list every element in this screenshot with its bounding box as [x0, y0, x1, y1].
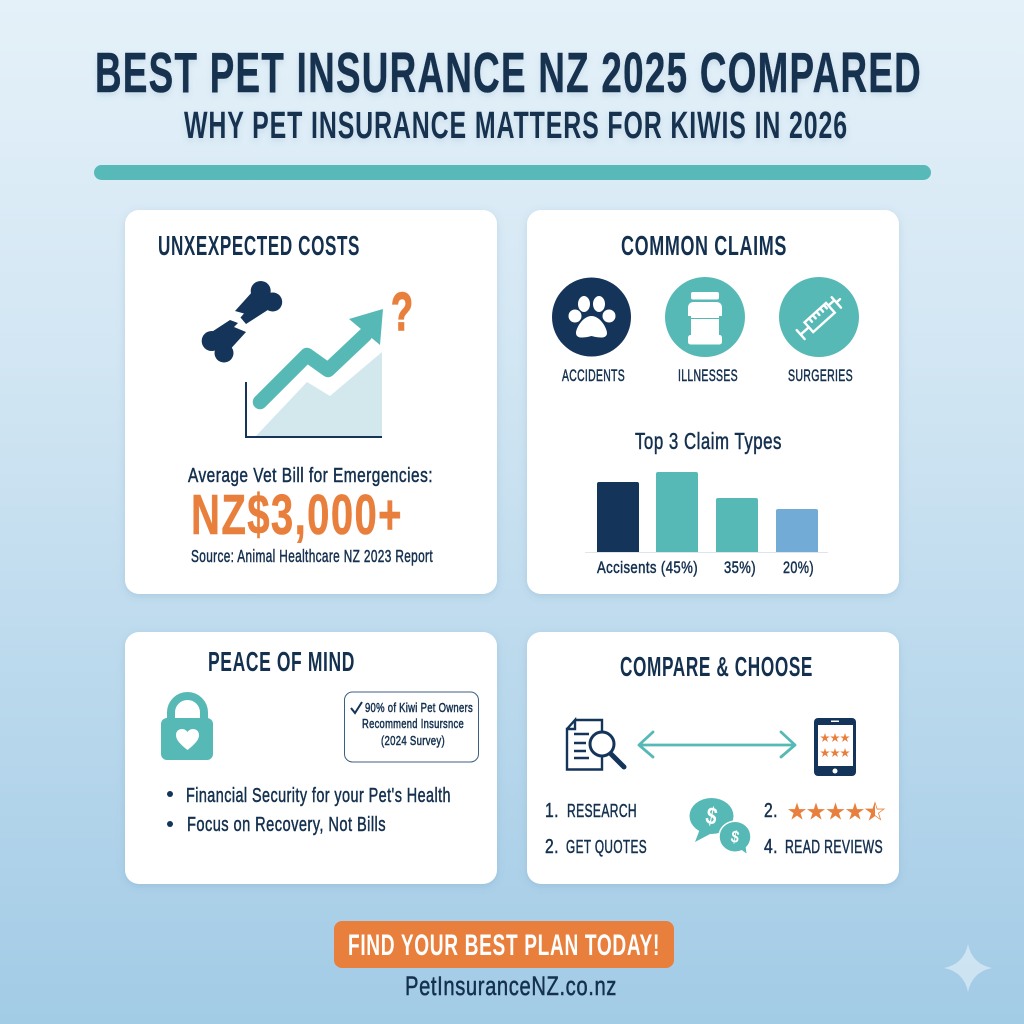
chart: rising cost	[246, 309, 383, 437]
step: 2 get quotes: GET QUOTES	[566, 836, 647, 857]
bullet two	[167, 814, 386, 836]
text: average vet bill label: Average Vet Bill for Emergencies:	[188, 465, 433, 487]
icon: syringe	[779, 277, 859, 357]
step: 1 research: RESEARCH	[567, 800, 637, 821]
bullet one	[167, 785, 451, 807]
callout line 1: 90% of Kiwi Pet Owners	[365, 700, 473, 715]
bar chart	[585, 472, 828, 553]
icon: check mark	[351, 702, 362, 713]
icon: sparkle	[944, 944, 992, 992]
step: 2 get quotes	[545, 836, 647, 858]
step: 4 read reviews	[764, 836, 883, 858]
icon: medicine jar	[665, 277, 745, 357]
callout line 2: Recommend Insursnce	[362, 716, 464, 731]
heading: unexpected costs: UNXEXPECTED COSTS	[158, 230, 360, 261]
panel: common claims	[527, 210, 899, 594]
callout: survey	[344, 692, 478, 762]
bullet one: Financial Security for your Pet's Health	[186, 785, 451, 807]
heading: compare and choose: COMPARE & CHOOSE	[620, 651, 813, 682]
icon: speech bubbles with dollars	[690, 798, 751, 854]
icon: document with magnifier	[567, 720, 624, 770]
call to action button	[334, 921, 674, 968]
icon: question mark: ?	[391, 282, 413, 342]
heading: peace of mind: PEACE OF MIND	[208, 646, 355, 677]
step: 4 read reviews: READ REVIEWS	[785, 836, 883, 857]
bar label: 20%: 20%)	[783, 558, 814, 577]
step: 4 read reviews: 4.	[764, 836, 778, 858]
arrow: double-headed	[639, 732, 795, 757]
website url: PetInsuranceNZ.co.nz	[405, 971, 617, 1001]
bullet two: Focus on Recovery, Not Bills	[187, 814, 386, 836]
bar label: accidents 45%: Accisents (45%)	[597, 558, 698, 577]
call to action button: FIND YOUR BEST PLAN TODAY!	[348, 929, 660, 962]
step: 2 get quotes: 2.	[545, 836, 559, 858]
icon: speech bubbles with dollars: $	[703, 802, 720, 831]
icon: paw	[552, 278, 631, 356]
bar label: 35%: 35%)	[724, 558, 756, 577]
step: 1 research	[545, 800, 637, 822]
icon: padlock with heart	[161, 696, 213, 760]
step: 2 star rating	[764, 800, 884, 822]
icon: broken bone	[202, 281, 282, 362]
stat: NZ$3,000+: NZ$3,000+	[191, 483, 403, 547]
panel: compare and choose	[527, 632, 899, 884]
panel: unexpected costs	[125, 210, 497, 594]
icon: speech bubbles with dollars: $	[729, 827, 741, 847]
callout line 3: (2024 Survey)	[381, 733, 445, 748]
icon: tablet with ratings	[814, 718, 856, 776]
text: source: Source: Animal Healthcare NZ 2023 Report	[191, 546, 433, 566]
step: 1 research: 1.	[545, 800, 559, 822]
label: illnesses: ILLNESSES	[678, 366, 738, 385]
label: accidents: ACCIDENTS	[562, 366, 625, 385]
label: surgeries: SURGERIES	[788, 366, 853, 385]
teal header bar	[94, 165, 931, 180]
heading: common claims: COMMON CLAIMS	[621, 230, 787, 261]
step: 2 star rating: 2.	[764, 800, 778, 822]
chart heading: top 3 claim types: Top 3 Claim Types	[635, 428, 782, 454]
panel: peace of mind	[125, 632, 497, 884]
